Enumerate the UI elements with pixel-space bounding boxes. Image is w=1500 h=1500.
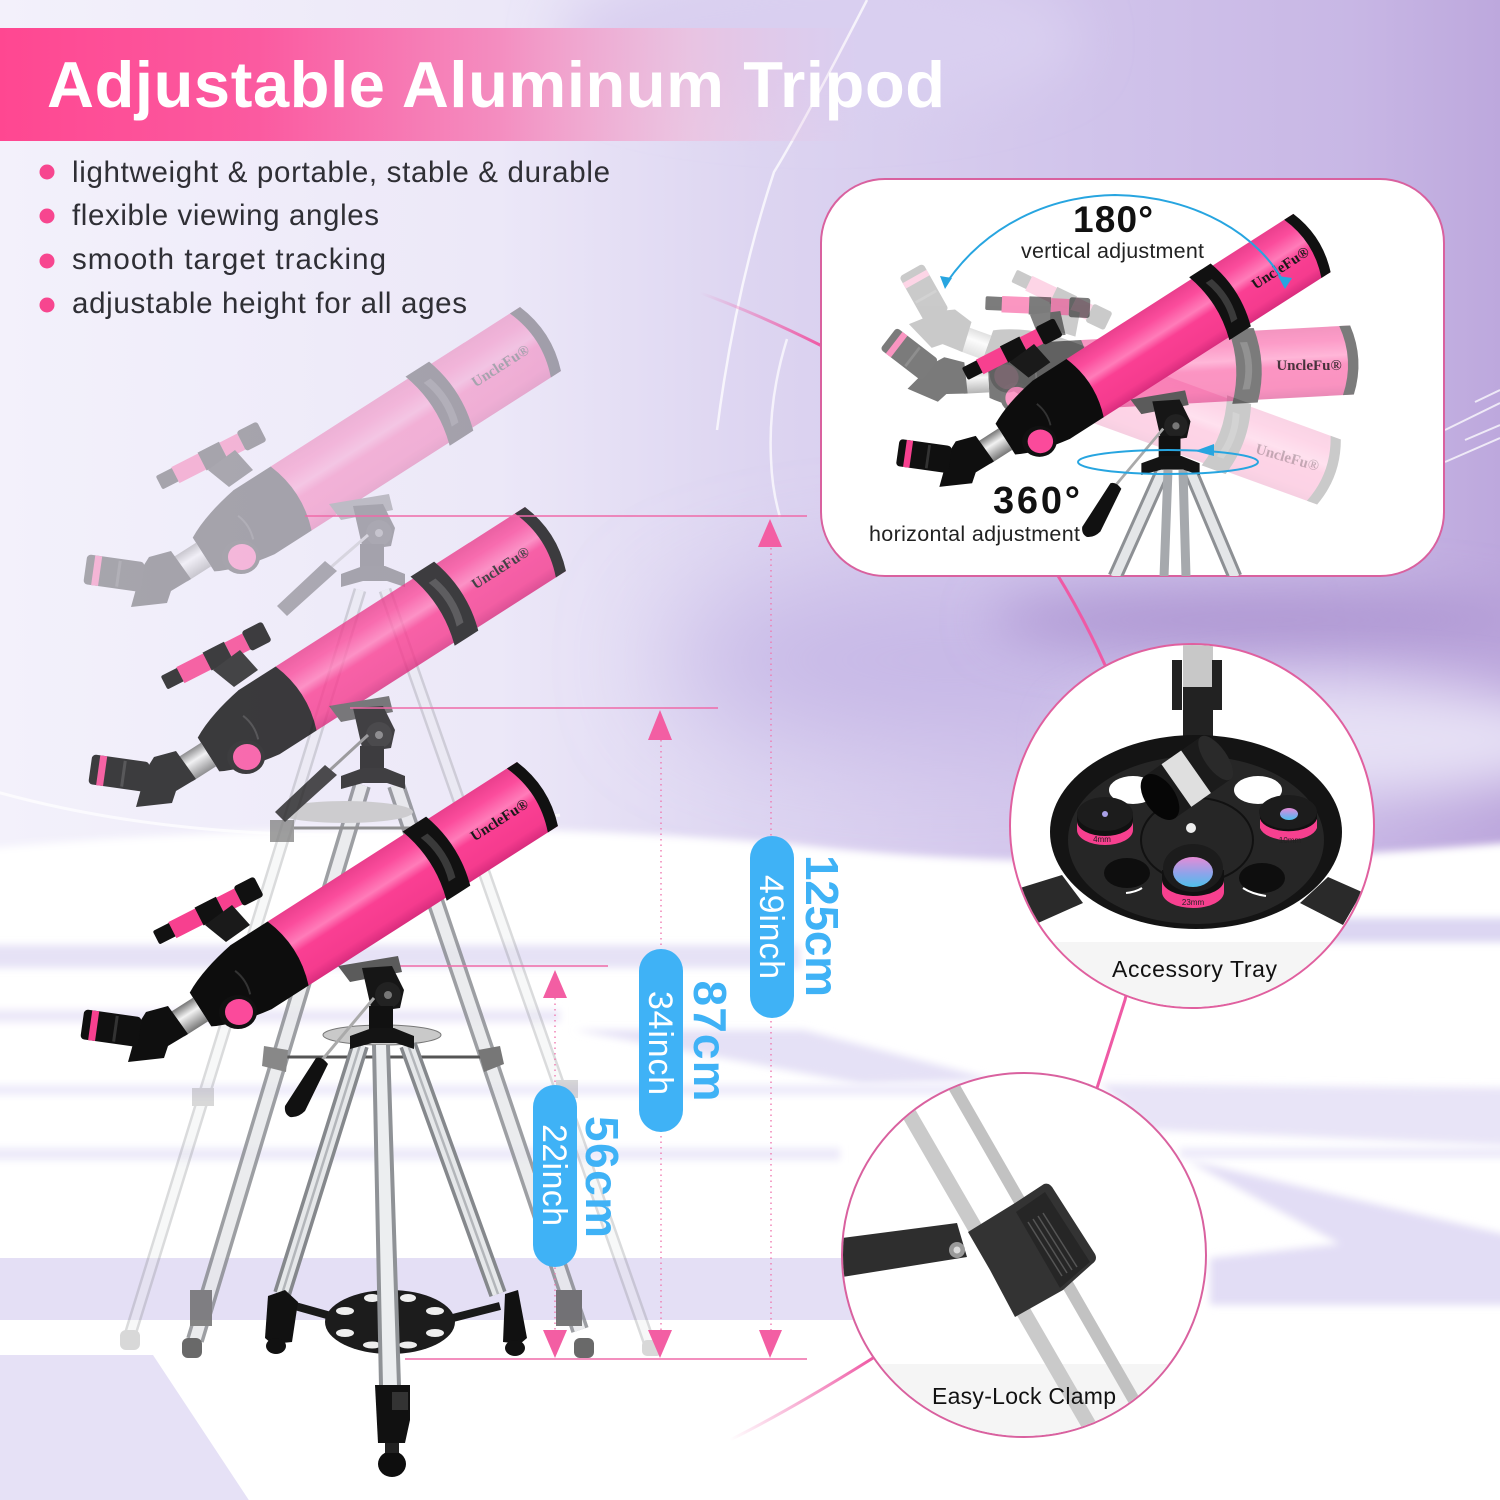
eyepiece on tray bbox=[1140, 736, 1229, 820]
title: Adjustable Aluminum Tripod bbox=[47, 48, 945, 121]
lens 4mm bbox=[1077, 797, 1133, 845]
rotating telescope illustration bbox=[882, 214, 1358, 576]
circle callout: easy-lock clamp bbox=[830, 1073, 1220, 1444]
horizontal adjustment label: horizontal adjustment bbox=[869, 522, 1080, 546]
tray photo bbox=[1022, 645, 1361, 1007]
telescope: middle position (semi-transparent) bbox=[88, 501, 594, 1358]
height labels: 56cm / 22inch: 22inch bbox=[535, 1124, 573, 1226]
clamp photo bbox=[843, 1086, 1168, 1436]
lower accessory tray bbox=[325, 1290, 455, 1354]
vertical adjustment label: 180° bbox=[1073, 199, 1153, 240]
feature bullet list: flexible viewing angles bbox=[72, 199, 379, 232]
header banner bbox=[0, 28, 945, 141]
vertical adjustment label bbox=[1021, 199, 1204, 263]
feature bullet list bbox=[40, 156, 610, 320]
height labels: 87cm / 34inch: 87cm bbox=[684, 980, 736, 1102]
rotating telescope illustration: UncleFu® bbox=[1249, 244, 1313, 293]
rotating telescope illustration: UncleFu® bbox=[1253, 441, 1321, 475]
lens 4mm: 4mm bbox=[1093, 835, 1111, 844]
rotating telescope illustration: UncleFu® bbox=[1276, 358, 1342, 374]
telescope: lowest position with full tripod: UncleFu® bbox=[468, 796, 532, 845]
lens 10mm bbox=[1259, 795, 1317, 845]
connector arc bbox=[695, 291, 1140, 1440]
caption: easy-lock clamp: Easy-Lock Clamp bbox=[932, 1383, 1116, 1409]
lens 23mm bbox=[1162, 844, 1224, 908]
height labels: 56cm / 22inch bbox=[533, 1085, 628, 1267]
height labels: 125cm / 49inch bbox=[750, 836, 848, 1018]
telescope: lowest position with full tripod bbox=[80, 756, 565, 1477]
feature bullet list: lightweight & portable, stable & durable bbox=[72, 156, 610, 189]
vertical adjustment label: vertical adjustment bbox=[1021, 239, 1204, 263]
height labels: 56cm / 22inch: 56cm bbox=[576, 1116, 628, 1238]
height labels: 125cm / 49inch: 49inch bbox=[752, 875, 790, 979]
caption: accessory tray: Accessory Tray bbox=[1112, 956, 1278, 982]
telescope: tallest position (faded) bbox=[83, 301, 662, 1356]
lens 23mm: 23mm bbox=[1182, 898, 1204, 907]
circle callout: accessory tray bbox=[1000, 640, 1400, 1012]
telescope: middle position (semi-transparent): UncleFu® bbox=[469, 544, 533, 593]
height labels: 87cm / 34inch bbox=[639, 949, 736, 1132]
horizontal adjustment label: 360° bbox=[993, 480, 1080, 522]
arrow: horizontal rotation ellipse bbox=[1078, 444, 1258, 474]
arrow: vertical rotation arc bbox=[940, 195, 1292, 289]
telescope: tallest position (faded): UncleFu® bbox=[469, 342, 533, 391]
horizontal adjustment label bbox=[869, 480, 1080, 546]
lens 10mm: 10mm bbox=[1279, 836, 1301, 845]
height labels: 87cm / 34inch: 34inch bbox=[641, 991, 679, 1095]
panel: rotation adjustment bbox=[821, 120, 1444, 640]
feature bullet list: smooth target tracking bbox=[72, 243, 386, 276]
height dimension lines bbox=[305, 516, 807, 1359]
feature bullet list: adjustable height for all ages bbox=[72, 287, 467, 320]
height labels: 125cm / 49inch: 125cm bbox=[796, 855, 848, 997]
